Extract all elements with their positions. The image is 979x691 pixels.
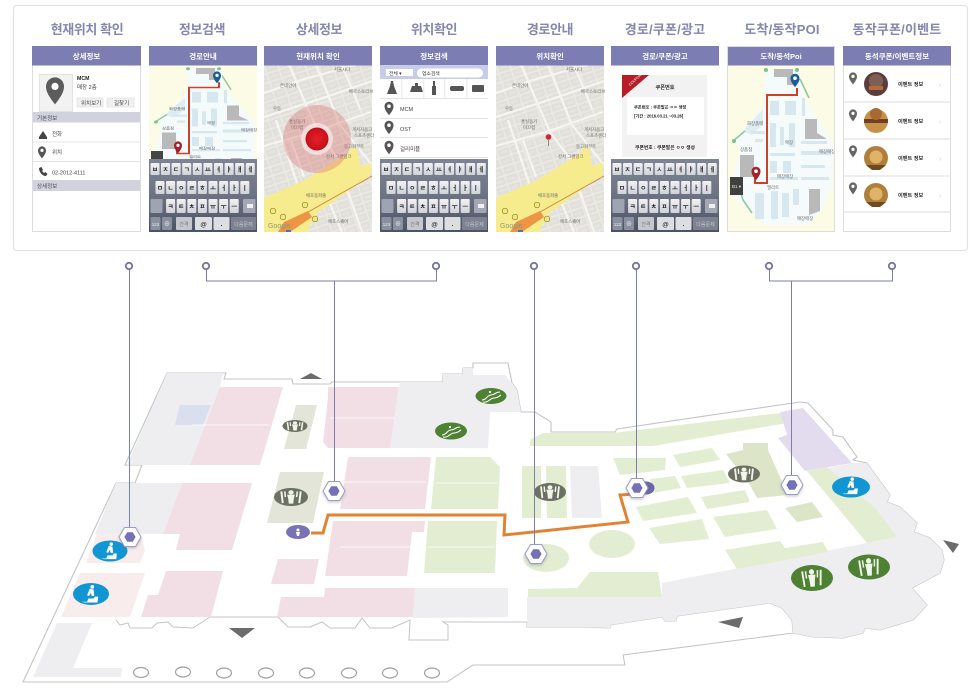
purple zone — [778, 408, 852, 471]
phone screen: coupon events list: › — [939, 82, 942, 89]
floor map — [23, 363, 944, 682]
hex marker: search and detail — [323, 482, 345, 502]
hex marker: location check — [525, 544, 547, 565]
icon: restroom green left — [791, 565, 833, 591]
heading: information search: 정보검색 — [179, 22, 225, 37]
phone screen: coupon with keyboard: 쿠폰번호 : 쿠폰발은 ㅇㅇ 생성 — [635, 144, 695, 151]
heading: coupon event: 동작쿠폰/이벤트 — [853, 22, 941, 37]
phone screen: route guidance with keyboard: 경로안내 — [189, 51, 217, 61]
phone screen: coupon events list: 동석쿠폰/이벤트정보 — [865, 51, 929, 61]
arrow: south entrance — [229, 628, 255, 638]
phone screen: details — [32, 46, 141, 232]
phone screen: details: 위치 — [52, 148, 62, 156]
phone screen: search list with keyboard: MCM — [400, 107, 414, 113]
icon: stairs right — [832, 476, 870, 498]
icon: location thumbnail — [40, 74, 72, 112]
icon: route end — [638, 482, 654, 494]
phone screen: search list with keyboard: OST — [400, 127, 412, 133]
icon: restroom small — [282, 420, 308, 432]
phone screen: details: 상세정보 — [73, 51, 100, 61]
phone screen: location map with pin: 위치확인 — [536, 51, 564, 61]
phone screen: coupon events list: 이벤트 정보 — [898, 117, 924, 125]
hex marker: current location — [119, 528, 141, 548]
heading: detail information: 상세정보 — [296, 22, 343, 37]
olive zones — [267, 405, 324, 523]
phone screen: coupon with keyboard: 쿠폰번호 : 쿠폰발은 ㅇㅇ 생성 — [634, 104, 686, 110]
phone screen: coupon events list: › — [939, 119, 942, 126]
heading: arrival POI: 도착/동작POI — [744, 22, 820, 37]
phone screen: coupon events list: › — [939, 156, 942, 163]
arrow: south-east entrance — [718, 617, 743, 628]
phone screen: arrival POI: B1 ▾ — [732, 184, 742, 189]
phone screen: details: 기본정보 — [37, 114, 57, 122]
phone screen: current location map — [264, 46, 374, 232]
green zones — [424, 413, 897, 597]
phone screen: coupon with keyboard: COUPON — [628, 73, 643, 87]
phone screen: coupon events list — [843, 46, 951, 232]
icon: stairs left bottom — [73, 583, 109, 605]
phone screen: search list with keyboard: 전체 ▾ — [389, 70, 402, 77]
phone screen: coupon with keyboard: [기간 : 2016.03.21 ~03.26] — [634, 112, 684, 120]
phone screen: search list with keyboard — [380, 46, 488, 232]
phone screen: search list with keyboard: 정보검색 — [420, 51, 448, 61]
heading: route guidance: 경로안내 — [527, 22, 573, 37]
phone screen: coupon events list: 이벤트 정보 — [898, 191, 924, 199]
phone screen: location map with pin — [496, 46, 606, 232]
grey floor areas — [33, 368, 944, 677]
heading: location check: 위치확인 — [411, 22, 457, 37]
phone screen: details: 길찾기 — [114, 99, 129, 107]
icon: stairs left top — [92, 540, 128, 562]
phone screen: search list with keyboard: 걸리미플 — [400, 145, 420, 153]
phone screen: current location map: 현재위치 확인 — [296, 51, 340, 61]
light pink zones — [61, 534, 145, 617]
phone screen: details: 전화 — [52, 130, 62, 138]
phone screen: search list with keyboard: 업소검색 — [422, 70, 440, 77]
phone screen: details: 상세정보 — [37, 182, 57, 190]
phone screen: coupon with keyboard: 쿠폰번호 — [655, 83, 675, 91]
heading: current location: 현재위치 확인 — [51, 22, 123, 37]
map outline — [23, 363, 944, 682]
icons: category row — [387, 79, 484, 98]
courtyard boundary — [116, 603, 793, 640]
panel: app screens — [14, 6, 968, 250]
icon: restroom large — [274, 488, 308, 506]
phone screen: coupon events list: › — [939, 193, 942, 200]
icon: restroom green right — [848, 554, 890, 580]
hex marker: route coupon — [626, 478, 648, 499]
heading: route coupon ad: 경로/쿠폰/광고 — [625, 22, 705, 37]
pink retail zones — [141, 387, 431, 617]
icon: route start — [286, 525, 310, 539]
phone screen: route guidance with keyboard — [149, 46, 258, 232]
arrow: north entrance — [300, 373, 322, 379]
phone screen: coupon events list: 이벤트 정보 — [898, 154, 924, 162]
callout connectors — [130, 270, 892, 545]
callout anchor dots — [126, 263, 895, 269]
phone screen: coupon events list: 이벤트 정보 — [898, 80, 924, 88]
phone screen: details: 매장 2층 — [77, 83, 97, 91]
phone screen: coupon with keyboard: 경로/쿠폰/광고 — [642, 51, 688, 61]
phone screen: coupon with keyboard — [611, 46, 719, 232]
blue zone — [175, 405, 211, 425]
arrow: east entrance — [943, 540, 959, 553]
phone screen: arrival POI: 도착/동석Poi — [760, 51, 802, 61]
phone screen: details: 02-2012-4111 — [52, 170, 85, 176]
phone screen: details: 위치보기 — [81, 99, 101, 107]
icon: escalator lower — [435, 422, 467, 440]
phone screen: arrival POI — [727, 46, 835, 232]
icon: restroom center — [534, 483, 566, 501]
parking circles — [134, 667, 440, 678]
route line — [311, 494, 637, 535]
hex marker: arrival — [781, 476, 803, 496]
icon: restroom right — [728, 466, 760, 482]
icon: escalator upper — [476, 388, 506, 404]
phone screen: details: MCM — [77, 76, 89, 82]
